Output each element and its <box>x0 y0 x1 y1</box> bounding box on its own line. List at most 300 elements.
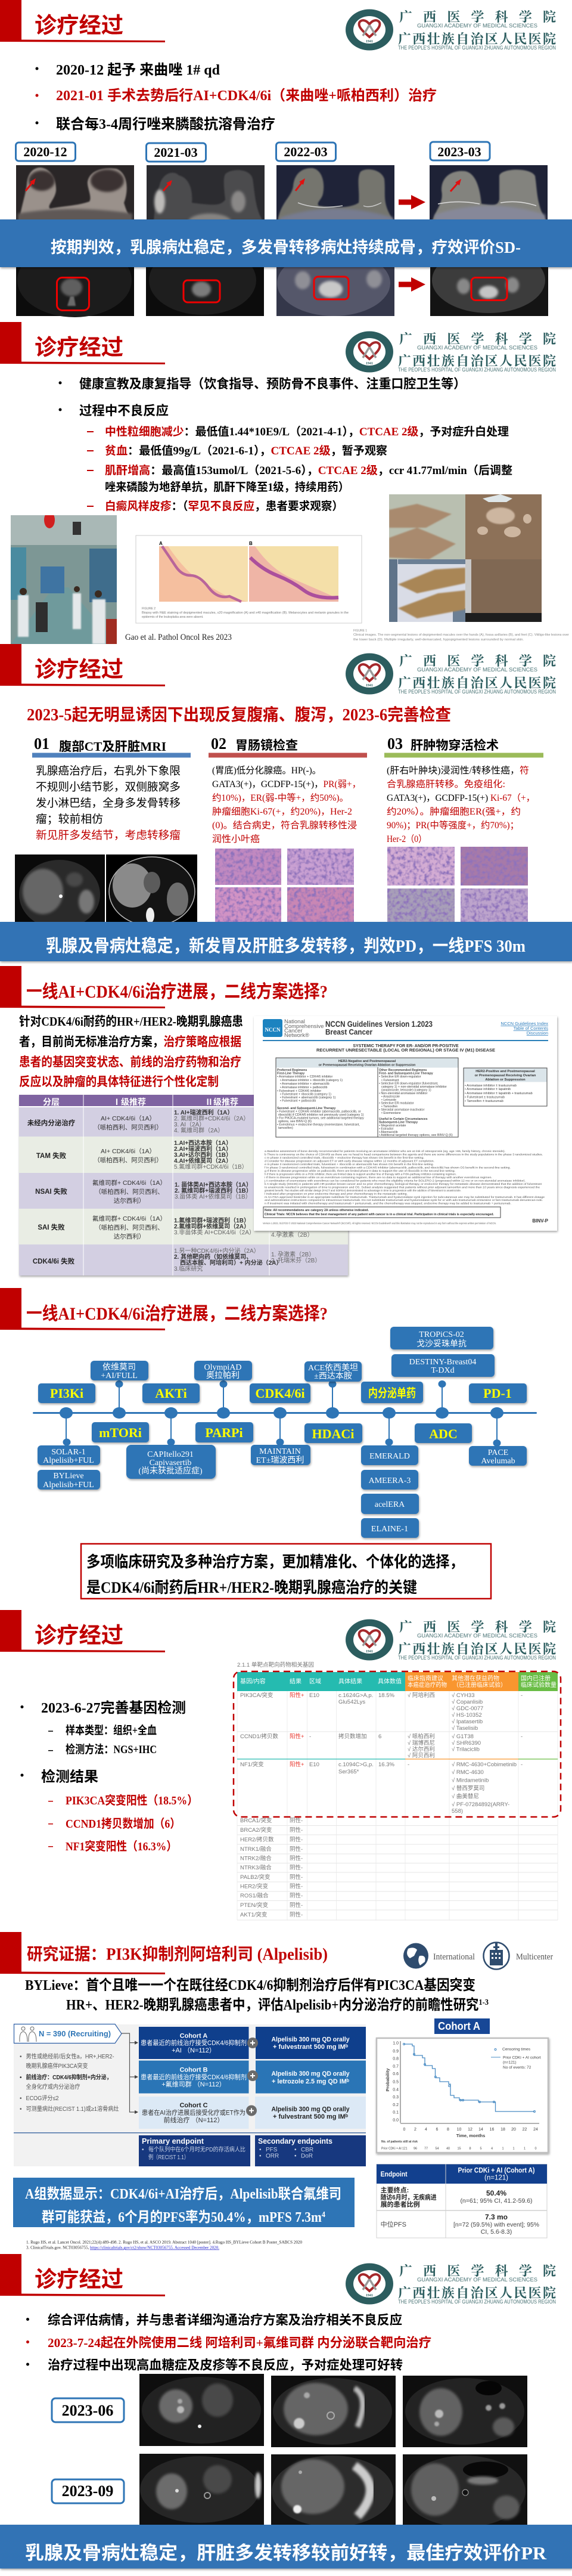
study heading: HR+、HER2-晚期乳腺癌患者中，评估Alpelisib+内分泌治疗的前瞻性研究 <box>66 1998 530 2013</box>
vitiligo caption: FIGURE 1 <box>353 629 367 633</box>
CSCO guideline table: 4.孕激素（2B） <box>271 1231 313 1239</box>
NCCN guideline page: greatest benefit. Two studies with similar design (FACT and SOFEA) demonstrated no advantage in time to progression with the addition of fulvestrant to anastrozole. <box>265 1189 461 1193</box>
gene report table: 基因/内容 <box>240 1677 266 1685</box>
gene report table: 具体数值 <box>378 1677 402 1685</box>
Kaplan-Meier chart: 0.0 <box>393 2118 399 2123</box>
hospital logo <box>346 329 556 373</box>
CSCO guideline table: AI+ CDK4/6i（1A） <box>101 1148 156 1155</box>
test summary list: CCND1拷贝数增加（6） <box>66 1817 181 1831</box>
NCCN guideline page: • Aromatase inhibitor ± trastuzumab <box>465 1084 517 1088</box>
gene report table: CCND1/拷贝数 <box>240 1733 278 1740</box>
enrollment chevron: N = 390 (Recruiting) <box>39 2030 111 2038</box>
cohort C <box>139 2097 366 2129</box>
Kaplan-Meier chart: 1.0 <box>393 2042 399 2045</box>
title: 诊疗经过 <box>35 1623 123 1648</box>
title: 诊疗经过 <box>35 2267 123 2292</box>
test summary list: PIK3CA突变阳性（18.5%） <box>66 1793 198 1807</box>
breast MRI 2023-03 <box>430 165 548 222</box>
gene report table: c.1624G>A,p. <box>338 1692 373 1699</box>
CSCO guideline table: 2.氟维司群+依维莫司（2A） <box>174 1222 250 1230</box>
gene report table: - <box>521 1733 523 1740</box>
breast MRI 2020-12 <box>16 165 134 222</box>
efficacy table: 7.3 mo <box>485 2213 508 2221</box>
Kaplan-Meier chart: Prior CDKi + AI 121 <box>381 2147 408 2150</box>
header bar <box>0 1288 165 1330</box>
NCCN guideline page: • Selective ER down-regulator (fulvestrant, <box>379 1082 439 1085</box>
second-line treatment bullets: 2023-7-24起在外院使用二线 阿培利司+氟维司群 内分泌联合靶向治疗 <box>48 2335 431 2350</box>
red dashed highlight <box>234 1671 561 1817</box>
gene report table: √ SHR6390 <box>452 1740 481 1747</box>
vitiligo caption <box>353 629 569 642</box>
CSCO guideline table: 1.另一种CDK4/6i+内分泌（2A） <box>174 1247 260 1255</box>
gene report table: PTEN/突变 <box>240 1902 268 1909</box>
gene report table: 阴性- <box>290 1892 303 1899</box>
test summary list: 2023-6-27完善基因检测 <box>41 1699 186 1716</box>
gastroscopy histology panels <box>215 849 354 923</box>
Cohort A label <box>434 2018 490 2034</box>
trial boxes: OlympiAD <box>204 1363 242 1372</box>
gene report table: 阴性- <box>290 1854 303 1862</box>
date label 2023-09 <box>52 2479 124 2503</box>
hospital logo: GUANGXI ACADEMY OF MEDICAL SCIENCES <box>417 23 537 29</box>
CSCO guideline table: 分层 <box>43 1097 60 1107</box>
rehab corridor photo <box>11 512 117 644</box>
icon: globe, International: International <box>433 1952 475 1962</box>
eligibility bullets: • <box>20 2075 22 2081</box>
Kaplan-Meier chart: No of events: 72 <box>503 2066 531 2070</box>
NCCN guideline page: m An FDA-approved biosimilar is an appropriate substitute for trastuzumab. Trastuzumab and hyaluronidase-oysk injection for subcutaneous use may be substituted for trastuzumab. It has different dosage <box>265 1196 545 1199</box>
trial boxes: DESTINY-Breast04 <box>409 1358 476 1367</box>
gene report table: - <box>309 1733 311 1740</box>
hospital logo: 广西医学科学院 <box>399 1617 556 1636</box>
CSCO guideline table: 2. 其他靶向药（如依维莫司、 <box>174 1253 252 1261</box>
references <box>26 2240 302 2250</box>
cohort A conclusion box: A组数据显示：CDK4/6i+AI治疗后，Alpelisib联合氟维司 <box>25 2186 341 2202</box>
NCCN guideline page: l Indicated after progression on prior endocrine therapy and prior chemotherapy in the metastatic setting. <box>265 1193 408 1196</box>
gene report table: √ 达尔西利 <box>408 1746 435 1753</box>
NCCN guideline page: • Non-steroidal aromatase inhibitor <box>379 1092 428 1095</box>
Kaplan-Meier chart: 1 <box>512 2147 515 2150</box>
NCCN guideline page: Table of Contents <box>514 1026 548 1031</box>
NCCN guideline page: • Aromatase inhibitor ± lapatinib <box>465 1088 511 1091</box>
cohort C: 患者在AI治疗进展后接受化疗或ET作为 <box>142 2109 245 2117</box>
gene report table: - <box>521 1761 523 1768</box>
CSCO guideline table: NSAI 失败 <box>35 1187 67 1196</box>
CSCO guideline table: TAM 失败 <box>36 1151 67 1160</box>
Kaplan-Meier chart: 0 <box>403 2128 405 2132</box>
trial boxes: ET±瑞波西利 <box>256 1456 304 1465</box>
CSCO guideline table: （哌柏西利、阿贝西利） <box>94 1123 163 1131</box>
gene report table: PIK3CA/突变 <box>240 1692 273 1699</box>
secondary endpoints: • <box>259 2153 262 2160</box>
secondary endpoints: CBR <box>301 2147 313 2153</box>
second-line treatment bullets: 综合评估病情，并与患者详细沟通治疗方案及治疗相关不良反应 <box>48 2312 402 2327</box>
CSCO guideline table: 氟维司群+ CDK4/6i（1A） <box>92 1215 166 1222</box>
education and adverse reaction list: 唑来磷酸为地舒单抗，肌酐下降至1级，持续用药） <box>105 480 349 494</box>
CSCO guideline table: 达尔西利） <box>114 1233 145 1240</box>
test summary list: 检测方法：NGS+IHC <box>66 1742 157 1756</box>
gene report table: E10 <box>309 1692 319 1699</box>
CSCO guideline table: AI+ CDK4/6i（1A） <box>101 1115 156 1122</box>
hospital logo: 广西医学科学院 <box>399 2261 556 2280</box>
category boxes above axis: CDK4/6i <box>255 1386 305 1401</box>
Kaplan-Meier chart: 12 <box>468 2128 472 2132</box>
hospital logo: 广西壮族自治区人民医院 <box>398 673 556 692</box>
Kaplan-Meier chart: Censoring times <box>502 2048 531 2051</box>
date label 2023-06 <box>52 2398 124 2422</box>
Kaplan-Meier chart <box>377 2038 548 2153</box>
education and adverse reaction list: 白癜风样皮疹：（罕见不良反应，患者要求观察） <box>105 499 343 513</box>
NCCN guideline page: • Additional targeted therapy options, see BINV-Q (6) <box>379 1134 453 1137</box>
conclusion banner <box>0 219 572 267</box>
Kaplan-Meier chart: 0.2 <box>393 2103 399 2107</box>
trial boxes: EMERALD <box>369 1452 410 1461</box>
Kaplan-Meier chart: 8 <box>469 2147 471 2150</box>
trial boxes: T-DXd <box>431 1366 455 1375</box>
NCCN guideline page: • Fulvestrant + CDK4/6 inhibitor (abemaciclib, palbociclib, or <box>277 1110 361 1114</box>
NCCN guideline page: • Aromatase inhibitor + ribociclib (category 1) <box>280 1079 343 1082</box>
column 02 findings: GATA3(+)，GCDFP-15(+)，PR(弱+， <box>212 779 361 789</box>
trial boxes: 戈沙妥珠单抗 <box>416 1339 467 1349</box>
date label 2022-03: 2022-03 <box>284 144 328 159</box>
column 03 heading <box>384 735 543 757</box>
Kaplan-Meier chart: 4 <box>491 2147 493 2150</box>
CSCO guideline table: 3.甾体类 AI+依维莫司（1B） <box>175 1193 251 1200</box>
CSCO guideline table: CDK4/6i 失败 <box>33 1257 75 1265</box>
column 02 heading: 胃肠镜检查 <box>235 738 298 753</box>
category boxes below axis: PARPi <box>205 1425 243 1440</box>
column 03 findings: (肝右叶肿块)浸润性/转移性癌， 符 <box>387 765 529 776</box>
trial boxes: ELAINE-1 <box>371 1525 408 1534</box>
date label 2023-06: 2023-06 <box>62 2402 113 2419</box>
treatment bullets <box>36 62 437 132</box>
NCCN logo <box>263 1018 324 1039</box>
vitiligo caption: the lower back (D). Multiple irregularly, well-demarcated, hypopigmented lesions surrounded by normal skin. <box>353 638 524 642</box>
date label 2023-03 <box>430 142 490 160</box>
column 02 findings: (胃底)低分化腺癌。HP(-)。 <box>212 765 321 776</box>
trial boxes: BYLieve <box>53 1472 84 1481</box>
column 02 findings: 约10%)，ER(弱-中等+，约50%)。 <box>212 792 349 803</box>
hospital logo: 广西医学科学院 <box>399 651 556 670</box>
gene report table: - <box>521 1692 523 1699</box>
CSCO guideline table: 2. 托瑞米芬（2B） <box>271 1256 321 1264</box>
eligibility bullets: 可测量病灶(RECIST 1.1)或≥1溶骨病灶 <box>26 2105 119 2113</box>
gene report table: AKT1/突变 <box>240 1911 268 1918</box>
skin biopsy figure: epidermis of the leukoplakia area were absent. <box>142 615 203 619</box>
cohort C: + fulvestrant 500 mg IMᵇ <box>273 2113 349 2120</box>
Kaplan-Meier chart: 22 <box>523 2128 527 2132</box>
gene report table: 16.3% <box>378 1761 394 1768</box>
efficacy table: Prior CDKi + AI (Cohort A) <box>458 2168 535 2175</box>
intro paragraph: 患者的基因突变状态、前线的治疗药物和治疗 <box>19 1055 241 1069</box>
gene report table: √ Ipatasertib <box>452 1719 483 1725</box>
column 02 findings <box>212 765 361 844</box>
NCCN guideline page: h If there is progression while on a PI3K inhibitor, there are limited data to support another line of therapy with a PI3K-pathway inhibitor-containing regimen. <box>265 1172 456 1176</box>
skin biopsy figure: B <box>249 541 253 546</box>
NCCN guideline page: and administration instructions compared to intravenous trastuzumab. Do not substitute trastuzumab and hyaluronidase-oysk for or with ado-trastuzumab emtansine or fam-trastuzumab deruxtecan-nxki. <box>265 1199 543 1202</box>
conclusion callout: 是CDK4/6i耐药后HR+/HER2-晚期乳腺癌治疗的关键 <box>86 1579 417 1596</box>
CSCO guideline table: 2. 氟维司群+瑞波西利（1B） <box>175 1187 252 1194</box>
gene report table: 阴性- <box>290 1846 303 1853</box>
NCCN guideline page: Useful in Certain Circumstances <box>379 1117 428 1121</box>
column 01 findings: 乳腺癌治疗后，右乳外下象限 <box>36 765 181 778</box>
NCCN guideline page: to anastrozole resulted in prolongation of time to progression and OS. Subset analysis suggested that patients without prior adjuvant tamoxifen and more than 10 years since diagnosis experienced the <box>265 1185 540 1189</box>
gene report table: √ PF-07284892(ARRY- <box>452 1801 509 1808</box>
trial boxes: TROPiCS-02 <box>419 1330 464 1339</box>
NCCN guideline page: • Fulvestrant + abemaciclib (category 1) <box>280 1096 336 1100</box>
trial boxes: AMEERA-3 <box>369 1476 411 1485</box>
primary endpoint: • <box>142 2147 144 2153</box>
column 01 findings: 不规则小结节影，双侧腋窝多 <box>36 781 181 794</box>
gene report table: HER2/拷贝数 <box>240 1836 274 1843</box>
Kaplan-Meier chart: 0.9 <box>393 2049 399 2054</box>
liver MRI row 2023-09 <box>139 2454 527 2528</box>
CSCO guideline table: 1. 甾体类AI+西达本胺（1A） <box>175 1181 252 1188</box>
NCCN guideline page: Second- and Subsequent-Line Therapy <box>277 1107 335 1110</box>
NCCN guideline page: • Tamoxifen <box>381 1105 397 1109</box>
eligibility bullets: • <box>20 2106 22 2113</box>
efficacy table: 50.4% <box>486 2189 506 2197</box>
conclusion banner <box>0 922 572 961</box>
CSCO guideline table: 2. 氟维司群+CDK4/6i（2A） <box>174 1114 249 1122</box>
secondary endpoints: • <box>294 2147 297 2153</box>
column 01 heading: 腹部CT及肝脏MRI <box>59 739 166 754</box>
education and adverse reaction list: 健康宣教及康复指导（饮食指导、预防骨不良事件、注重口腔卫生等） <box>79 376 466 391</box>
conclusion callout: 多项临床研究及多种治疗方案，更加精准化、个体化的选择， <box>86 1553 464 1571</box>
gene report table: NTRK3/融合 <box>240 1864 272 1871</box>
NCCN guideline page: NCCN Guidelines Index <box>500 1021 548 1026</box>
category boxes above axis: PD-1 <box>483 1386 512 1401</box>
vitiligo caption: Clinical images. The non-segmental lesions of depigmented macules over the hands (A), fossa axillaries (B), and feet (C). Vitiligo-like lesions over <box>353 633 569 637</box>
study design schema <box>14 2024 366 2166</box>
eligibility bullets: 男性或绝经前/后女性a，HR+,HER2- <box>26 2052 114 2060</box>
gene report table: √ Taselisib <box>452 1725 478 1732</box>
citation: Gao et al. Pathol Oncol Res 2023 <box>125 633 232 642</box>
NCCN guideline page <box>254 1016 557 1231</box>
treatment bullets: 联合每3-4周行唑来膦酸抗溶骨治疗 <box>56 116 275 132</box>
CSCO guideline table: （哌柏西利、阿贝西利） <box>94 1156 163 1164</box>
enrollment chevron <box>14 2024 122 2043</box>
Kaplan-Meier chart: 0.7 <box>393 2064 399 2069</box>
NCCN guideline page: • Fulvestrant + ribociclib (category 1) <box>280 1092 331 1096</box>
cohort A: + fulvestrant 500 mg IMᵇ <box>273 2044 349 2051</box>
trial boxes: 奥拉帕利 <box>206 1370 240 1380</box>
second-line treatment bullets <box>26 2312 431 2372</box>
NCCN guideline page: d Consider for disease progression on adjuvant ET or with early disease relapse within 12 months of adjuvant ET completion. <box>265 1159 434 1163</box>
CSCO guideline table <box>19 1095 348 1275</box>
column 01 findings: 发小淋巴结，全身多发骨转移 <box>36 797 181 810</box>
gene report table: Glu542Lys <box>338 1699 365 1705</box>
trial boxes: ACE依西美坦 <box>308 1363 358 1373</box>
gene report table: 阴性- <box>290 1911 303 1918</box>
gene report table: 阴性- <box>290 1874 303 1881</box>
slide 3: new symptoms and work-up <box>0 644 572 961</box>
NCCN guideline page: ribociclib) if CDK4/6 inhibitor not previously used (category 1) <box>278 1113 364 1117</box>
NCCN guideline page: Breast Cancer <box>325 1027 372 1036</box>
secondary endpoints: • <box>259 2147 262 2153</box>
eligibility bullets <box>20 2052 119 2113</box>
NCCN guideline page: • Fulvestrant <box>381 1079 399 1082</box>
timeline axis <box>33 1380 537 1447</box>
conclusion banner: 乳腺及骨病灶稳定，肝脏多发转移较前好转，最佳疗效评价PR <box>25 2543 547 2563</box>
NCCN guideline page: • Exemestane <box>381 1111 401 1115</box>
skin biopsy figure: Biopsy with H&E staining of depigmented macules, x20 magnification (A) and x40 magnification (B). Melanocytes and melanin granules in the <box>142 611 349 615</box>
efficacy table: CI, 5.6-8.3) <box>481 2228 512 2236</box>
hospital logo: 广西壮族自治区人民医院 <box>398 2283 556 2302</box>
title: 诊疗经过 <box>35 13 123 38</box>
red heading: 2023-5起无明显诱因下出现反复腹痛、腹泻，2023-6完善检查 <box>27 705 451 724</box>
gene report table: √ Copanlisib <box>452 1699 483 1705</box>
column 03 findings: GATA3(+)，GCDFP-15(+) Ki-67（+， <box>387 793 535 803</box>
treatment bullets: 2020-12 起予 来曲唑 1# qd <box>56 62 220 78</box>
breast MRI 2021-03 <box>147 165 265 219</box>
Kaplan-Meier chart: Probability <box>385 2068 390 2091</box>
Kaplan-Meier chart: Prior CDKi + AI cohort <box>503 2056 541 2060</box>
column 03 heading: 肝肿物穿活检术 <box>411 738 499 753</box>
title: 诊疗经过 <box>35 335 123 360</box>
Kaplan-Meier chart: 2 <box>414 2128 416 2132</box>
bone CT 2020-12 <box>16 243 134 317</box>
Kaplan-Meier chart: (n=121) <box>503 2061 517 2064</box>
eligibility bullets: ECOG评分≤2 <box>26 2095 59 2102</box>
eligibility bullets: 前线治疗：CDK4/6抑制剂+内分泌， <box>26 2073 112 2081</box>
column 01 findings: 瘤；较前相仿 <box>36 813 103 826</box>
gene report table: 阴性- <box>290 1836 303 1843</box>
gene report table: 阳性+ <box>290 1761 304 1768</box>
category boxes above axis <box>38 1382 527 1403</box>
NCCN guideline page: Preferred Regimens <box>277 1069 307 1072</box>
hospital logo: 广西壮族自治区人民医院 <box>398 29 556 48</box>
gene report table: √ 曲美替尼 <box>452 1792 479 1800</box>
CSCO guideline table: 2.AI+瑞波西利（1A） <box>174 1145 232 1153</box>
NCCN logo: NCCN <box>265 1027 281 1033</box>
date label 2020-12: 2020-12 <box>23 144 67 159</box>
trial boxes: MAINTAIN <box>259 1447 301 1456</box>
hospital logo <box>346 1617 556 1661</box>
primary endpoint: 每个队列中在6个月时无PD的存活病人比 <box>148 2145 245 2153</box>
gene report table: √ CYH33 <box>452 1692 474 1699</box>
NCCN guideline page: n If treatment was initiated with chemotherapy and trastuzumab + pertuzumab, and the chemotherapy was stopped, endocrine therapy may be added to trastuzumab + pertuzumab. <box>265 1202 511 1206</box>
liver biopsy histology panels <box>387 847 528 923</box>
category boxes below axis <box>92 1422 472 1443</box>
slide 5: pipeline timeline <box>0 1288 537 1599</box>
Kaplan-Meier chart: 0 <box>534 2147 537 2150</box>
trial boxes: 依维莫司 <box>102 1363 136 1372</box>
hospital logo: GUANGXI ACADEMY OF MEDICAL SCIENCES <box>417 2277 537 2283</box>
hospital logo: 1941 <box>366 362 373 366</box>
column 03 findings: 90%)；PR(中等强度+，约70%)； <box>387 820 519 831</box>
trial boxes: ±西达本胺 <box>314 1371 352 1381</box>
gene report table <box>237 1661 558 1920</box>
header bar <box>0 966 165 1008</box>
NCCN guideline page: j A combination of exemestane with everolimus can be considered for patients who meet the eligibility criteria for BOLERO-2 (progressed within 12 mo or on non-steroidal aromatase inhibitor). <box>264 1179 526 1183</box>
slide 6: genetic testing <box>0 1610 561 1920</box>
gene report table: Ser365* <box>338 1769 359 1775</box>
gene report table: √ Trilaciclib <box>452 1746 480 1753</box>
NCCN logo: Cancer <box>284 1028 303 1034</box>
NCCN guideline page: or Premenopausal Receiving Ovarian Ablation or Suppression <box>319 1064 416 1067</box>
cohort A conclusion box: 群可能获益，6个月的PFS率为50.4%，mPFS 7.3m <box>42 2210 356 2225</box>
cohort B: +氟维司群 （N=112） <box>161 2080 226 2088</box>
gene report table: √ 哌柏西利 <box>408 1733 435 1740</box>
cohort A <box>139 2027 366 2059</box>
secondary endpoints: DoR <box>301 2153 313 2160</box>
date label 2021-03: 2021-03 <box>154 145 198 160</box>
gene report table: HER2/突变 <box>240 1883 268 1890</box>
Kaplan-Meier chart: 0.8 <box>393 2057 399 2061</box>
hospital logo <box>346 2261 556 2305</box>
gene report table: 阳性+ <box>290 1692 304 1699</box>
plus icons <box>246 2038 258 2116</box>
secondary endpoints: PFS <box>266 2147 278 2153</box>
cohort B <box>139 2061 366 2094</box>
column 03 findings: 合乳腺癌肝转移。免疫组化: <box>387 779 505 789</box>
NCCN guideline page: • Tamoxifen ± trastuzumab <box>465 1100 503 1103</box>
column 02 heading <box>209 735 367 757</box>
gene report table: 结果 <box>290 1677 301 1685</box>
gene report table: 18.5% <box>378 1692 394 1699</box>
CSCO guideline table: 1.AI+西达本胺（1A） <box>174 1139 232 1147</box>
CSCO guideline table: 3. AI（2A） <box>174 1121 205 1128</box>
column 02 findings: (0)。结合病史，符合乳腺转移性浸 <box>212 820 357 831</box>
gene report table: 拷贝数增加 <box>338 1733 367 1740</box>
category boxes above axis: PI3Ki <box>50 1386 83 1401</box>
column 03 findings <box>387 765 535 844</box>
study heading: 1-3 <box>478 1998 489 2007</box>
header bar <box>0 322 165 364</box>
trial boxes: (尚未获批适应症) <box>138 1466 203 1476</box>
NCCN guideline page: • Abemaciclib <box>379 1131 398 1134</box>
trial boxes <box>38 1327 527 1538</box>
secondary endpoints <box>255 2135 366 2166</box>
treatment bullets: 2021-01 手术去势后行AI+CDK4/6i（来曲唑+哌柏西利）治疗 <box>56 88 437 104</box>
slide 4: second-line options and guidelines <box>0 966 557 1275</box>
liver MRI row 2023-06 <box>139 2374 527 2447</box>
NCCN guideline page: e In phase 3 randomized controlled trials, fulvestrant + ribociclib or abemaciclib has shown OS benefit in the first-line setting. <box>265 1163 434 1166</box>
NCCN guideline page: a Baseline assessment of bone density recommended for patients receiving an aromatase inhibitor who are at risk of osteoporosis (eg, age >65, family history, chronic steroids). <box>265 1150 505 1153</box>
NCCN logo: National <box>284 1018 305 1025</box>
skin biopsy figure: A <box>159 541 163 546</box>
column 02 heading: 02 <box>211 735 226 753</box>
NCCN guideline page: or Premenopausal Receiving Ovarian <box>475 1074 536 1078</box>
gene report table: 阴性- <box>290 1883 303 1890</box>
gene report table: 临床试验数量 <box>521 1681 557 1689</box>
test summary list: 样本类型：组织+全血 <box>66 1723 157 1737</box>
gene report table: √ HS-10352 <box>452 1712 482 1719</box>
Kaplan-Meier chart: 20 <box>511 2128 516 2132</box>
secondary endpoints: ORR <box>266 2153 279 2160</box>
bone CT 2021-03 <box>146 246 264 316</box>
efficacy table: (n=121) <box>484 2174 508 2181</box>
gene report table: NTRK1/融合 <box>240 1846 272 1853</box>
efficacy table: 展的患者比例 <box>381 2200 420 2209</box>
gene report table: BRCA2/突变 <box>240 1826 272 1834</box>
NCCN guideline page: (anastrozole, letrozole) (category 1) <box>381 1089 431 1092</box>
trial boxes: CAPItello291 <box>147 1450 194 1459</box>
progress arrow lower <box>399 277 425 292</box>
NCCN guideline page: • Aromatase inhibitor + CDK4/6 inhibitor <box>277 1075 333 1079</box>
CSCO guideline table: 3.临床研究 <box>174 1265 203 1272</box>
cohort A conclusion box <box>13 2178 355 2227</box>
study heading <box>25 1977 489 2013</box>
Kaplan-Meier chart: 4 <box>425 2128 427 2132</box>
hospital logo: 广西医学科学院 <box>399 329 556 348</box>
trial boxes: Alpelisib+FUL <box>43 1481 94 1490</box>
gene report table: √ 阿培利西 <box>408 1692 435 1699</box>
conclusion banner <box>0 2525 572 2569</box>
icon: globe, International <box>403 1943 475 1969</box>
eligibility bullets: • <box>20 2095 22 2102</box>
